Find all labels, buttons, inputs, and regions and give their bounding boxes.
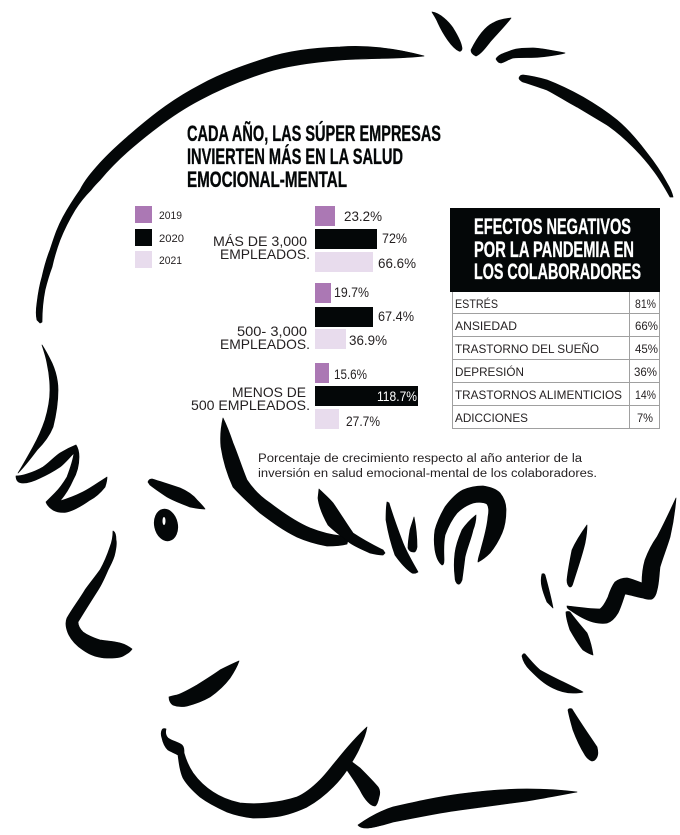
table rows: 45% bbox=[635, 342, 658, 356]
icon: eye bbox=[151, 507, 181, 543]
table rows: ESTRÉS bbox=[455, 296, 498, 311]
icon: ear bbox=[434, 486, 506, 565]
stroke: eyebrow bbox=[148, 479, 205, 509]
chart note: inversión en salud emocional-mental de los colaboradores. bbox=[258, 468, 597, 480]
panel: efectos negativos table bbox=[450, 208, 660, 428]
stroke: sideburn long bbox=[386, 502, 418, 573]
table rows: 14% bbox=[635, 388, 656, 402]
bar chart: más de 3,000 empleados bbox=[213, 206, 416, 272]
table rows bbox=[455, 296, 658, 425]
stroke: sideburn short bbox=[408, 517, 417, 552]
title: CADA AÑO, LAS SÚPER EMPRESAS bbox=[187, 121, 441, 146]
bar chart: menos de 500 empleados: 27.7% bbox=[346, 413, 380, 429]
bar chart: 500-3,000 empleados: EMPLEADOS. bbox=[220, 336, 310, 352]
bar chart: más de 3,000 empleados: 66.6% bbox=[378, 255, 416, 271]
legend bbox=[135, 206, 184, 268]
bar chart: 500-3,000 empleados: 36.9% bbox=[349, 332, 387, 348]
bar chart: menos de 500 empleados: 118.7% bbox=[377, 388, 417, 404]
table rows: DEPRESIÓN bbox=[455, 364, 524, 379]
table rows: ANSIEDAD bbox=[455, 319, 517, 333]
bar chart: menos de 500 empleados: 15.6% bbox=[334, 366, 367, 382]
table rows: 36% bbox=[634, 365, 657, 379]
bar chart: menos de 500 empleados bbox=[191, 363, 418, 429]
stroke: hair spark 1 bbox=[432, 12, 462, 51]
stroke: temple curve bbox=[221, 418, 348, 546]
title: INVIERTEN MÁS EN LA SALUD bbox=[187, 144, 403, 169]
title: EMOCIONAL-MENTAL bbox=[187, 167, 347, 192]
table rows: 66% bbox=[635, 319, 658, 333]
stroke: neck right upper bbox=[522, 654, 583, 693]
stroke: top of head arc bbox=[36, 46, 424, 323]
table rows: TRASTORNOS ALIMENTICIOS bbox=[455, 388, 622, 402]
bar chart: 500-3,000 empleados: 19.7% bbox=[334, 284, 369, 300]
bar chart: 500-3,000 empleados: 500- 3,000 bbox=[237, 323, 307, 339]
bar chart: más de 3,000 empleados: EMPLEADOS. bbox=[220, 246, 310, 262]
title bbox=[187, 121, 441, 192]
chart note bbox=[258, 453, 597, 480]
stroke: hair spark 2 bbox=[471, 18, 511, 56]
icon: inner ear bbox=[454, 515, 476, 584]
table heading bbox=[450, 208, 660, 292]
table rows: ADICCIONES bbox=[455, 411, 528, 425]
table rows: 81% bbox=[635, 297, 656, 311]
stroke: hair spark 3 bbox=[496, 48, 565, 63]
legend: 2020 bbox=[159, 233, 184, 245]
legend: 2021 bbox=[159, 255, 182, 267]
stroke: nape zigzag bbox=[567, 498, 676, 623]
stroke: nose bbox=[66, 531, 132, 658]
bar chart: menos de 500 empleados: 500 EMPLEADOS. bbox=[191, 397, 310, 413]
stroke: mouth bbox=[169, 661, 239, 707]
stroke: below nape zigzag bbox=[566, 612, 593, 655]
stroke: back of head arc bbox=[519, 75, 673, 197]
stroke: temple branch bbox=[318, 489, 385, 555]
bar chart: más de 3,000 empleados: MÁS DE 3,000 bbox=[213, 233, 307, 249]
legend: 2019 bbox=[159, 210, 182, 222]
table rows: TRASTORNO DEL SUEÑO bbox=[455, 342, 599, 356]
bar chart: menos de 500 empleados: MENOS DE bbox=[232, 384, 306, 400]
stroke: jaw and chin bbox=[161, 727, 380, 818]
stroke: neck right lower bbox=[568, 709, 598, 761]
bar chart: 500-3,000 empleados bbox=[220, 283, 414, 352]
bar chart: más de 3,000 empleados: 23.2% bbox=[344, 208, 382, 224]
table rows: 7% bbox=[637, 411, 653, 425]
stroke: brow zigzag bbox=[16, 445, 107, 512]
stroke: forehead bbox=[18, 345, 58, 473]
stroke: hairline long bbox=[567, 525, 587, 587]
bar chart: 500-3,000 empleados: 67.4% bbox=[378, 308, 414, 324]
chart note: Porcentaje de crecimiento respecto al año anterior de la bbox=[258, 453, 583, 465]
stroke: neck bottom bbox=[358, 789, 577, 828]
bar chart: más de 3,000 empleados: 72% bbox=[382, 230, 407, 246]
stroke: hairline short bbox=[541, 574, 553, 608]
